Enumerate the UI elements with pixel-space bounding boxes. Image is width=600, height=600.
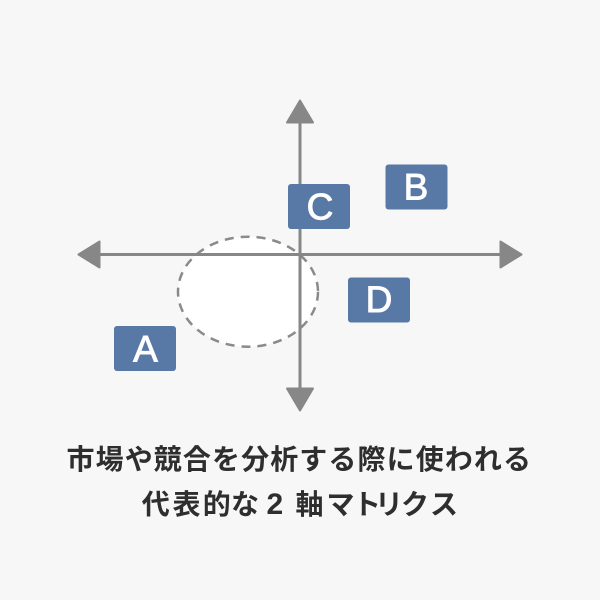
caption — [66, 444, 531, 521]
label box A: A — [133, 328, 158, 370]
vertical axis arrow — [287, 100, 313, 410]
horizontal axis arrow — [78, 242, 522, 268]
caption: 軸マトリクス — [296, 489, 458, 520]
label box B — [386, 164, 448, 210]
label box D: D — [366, 279, 392, 320]
dashed ellipse highlight — [178, 237, 318, 347]
caption: 2 — [266, 488, 283, 521]
label box A — [114, 326, 176, 371]
caption: 代表的な — [142, 489, 259, 520]
label box D — [348, 278, 410, 322]
caption: 市場や競合を分析する際に使われる — [66, 444, 531, 475]
label box C: C — [307, 186, 333, 228]
label box B: B — [404, 166, 428, 208]
label box C — [288, 184, 350, 229]
